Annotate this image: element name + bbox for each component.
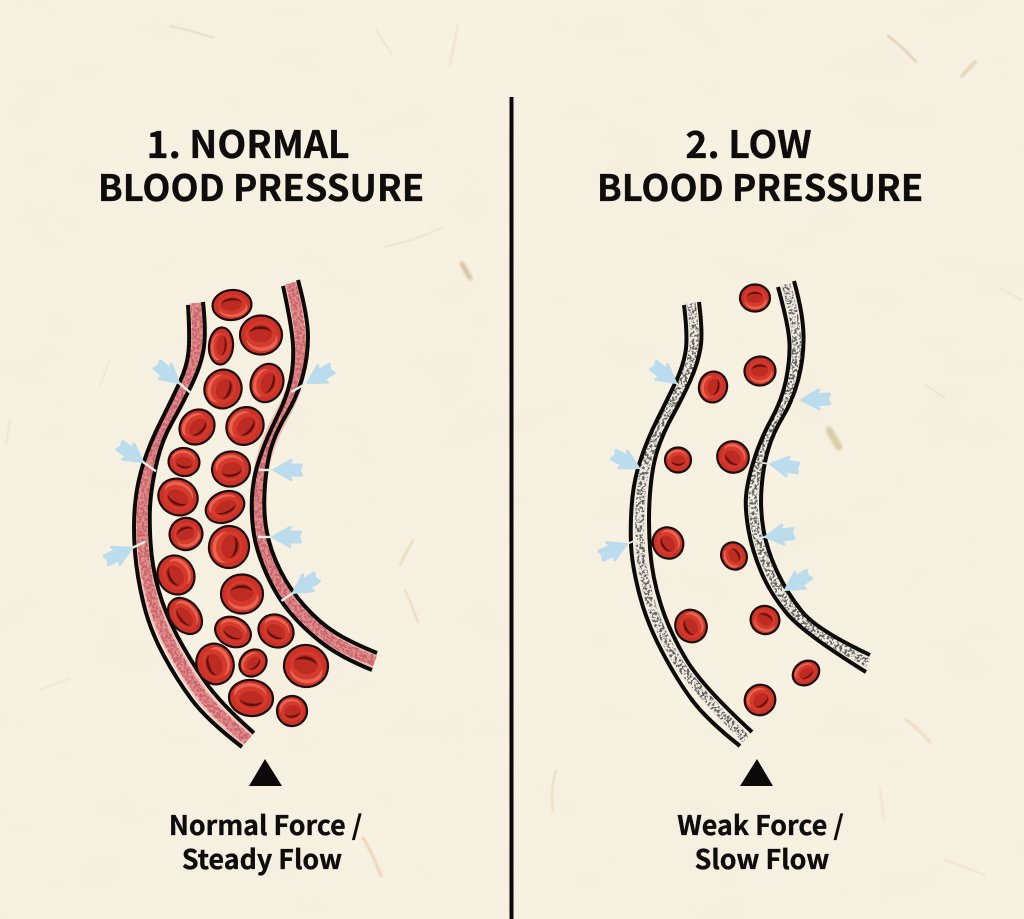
title: low blood pressure: BLOOD PRESSURE [597,159,923,212]
caption: normal force: Normal Force / [169,804,362,843]
center divider [510,97,514,919]
caption: weak force: Weak Force / [677,804,844,843]
flow arrowhead, low [740,759,773,786]
flow arrowhead, normal [249,759,282,786]
vessel left wall, grey [631,302,752,746]
vessel left wall, pink [134,302,254,747]
red blood cells, dense [150,288,331,728]
title: normal blood pressure: BLOOD PRESSURE [98,159,424,212]
caption: weak force: Slow Flow [695,838,829,877]
caption: weak force [677,804,844,877]
blue pressure arrows, low [597,358,830,601]
vessel right wall, pink [252,280,377,670]
caption: normal force: Steady Flow [182,838,342,877]
blue pressure arrows, normal [102,357,336,609]
title: normal blood pressure [98,114,424,212]
title: low blood pressure [597,114,923,212]
red blood cells, sparse [647,284,824,721]
panel: low pressure blood vessel [597,281,870,746]
title: low blood pressure: 2. LOW [685,114,812,169]
title: normal blood pressure: 1. NORMAL [146,114,350,169]
caption: normal force [169,804,362,877]
panel: normal blood vessel [102,280,377,747]
vessel right wall, grey [746,281,870,672]
